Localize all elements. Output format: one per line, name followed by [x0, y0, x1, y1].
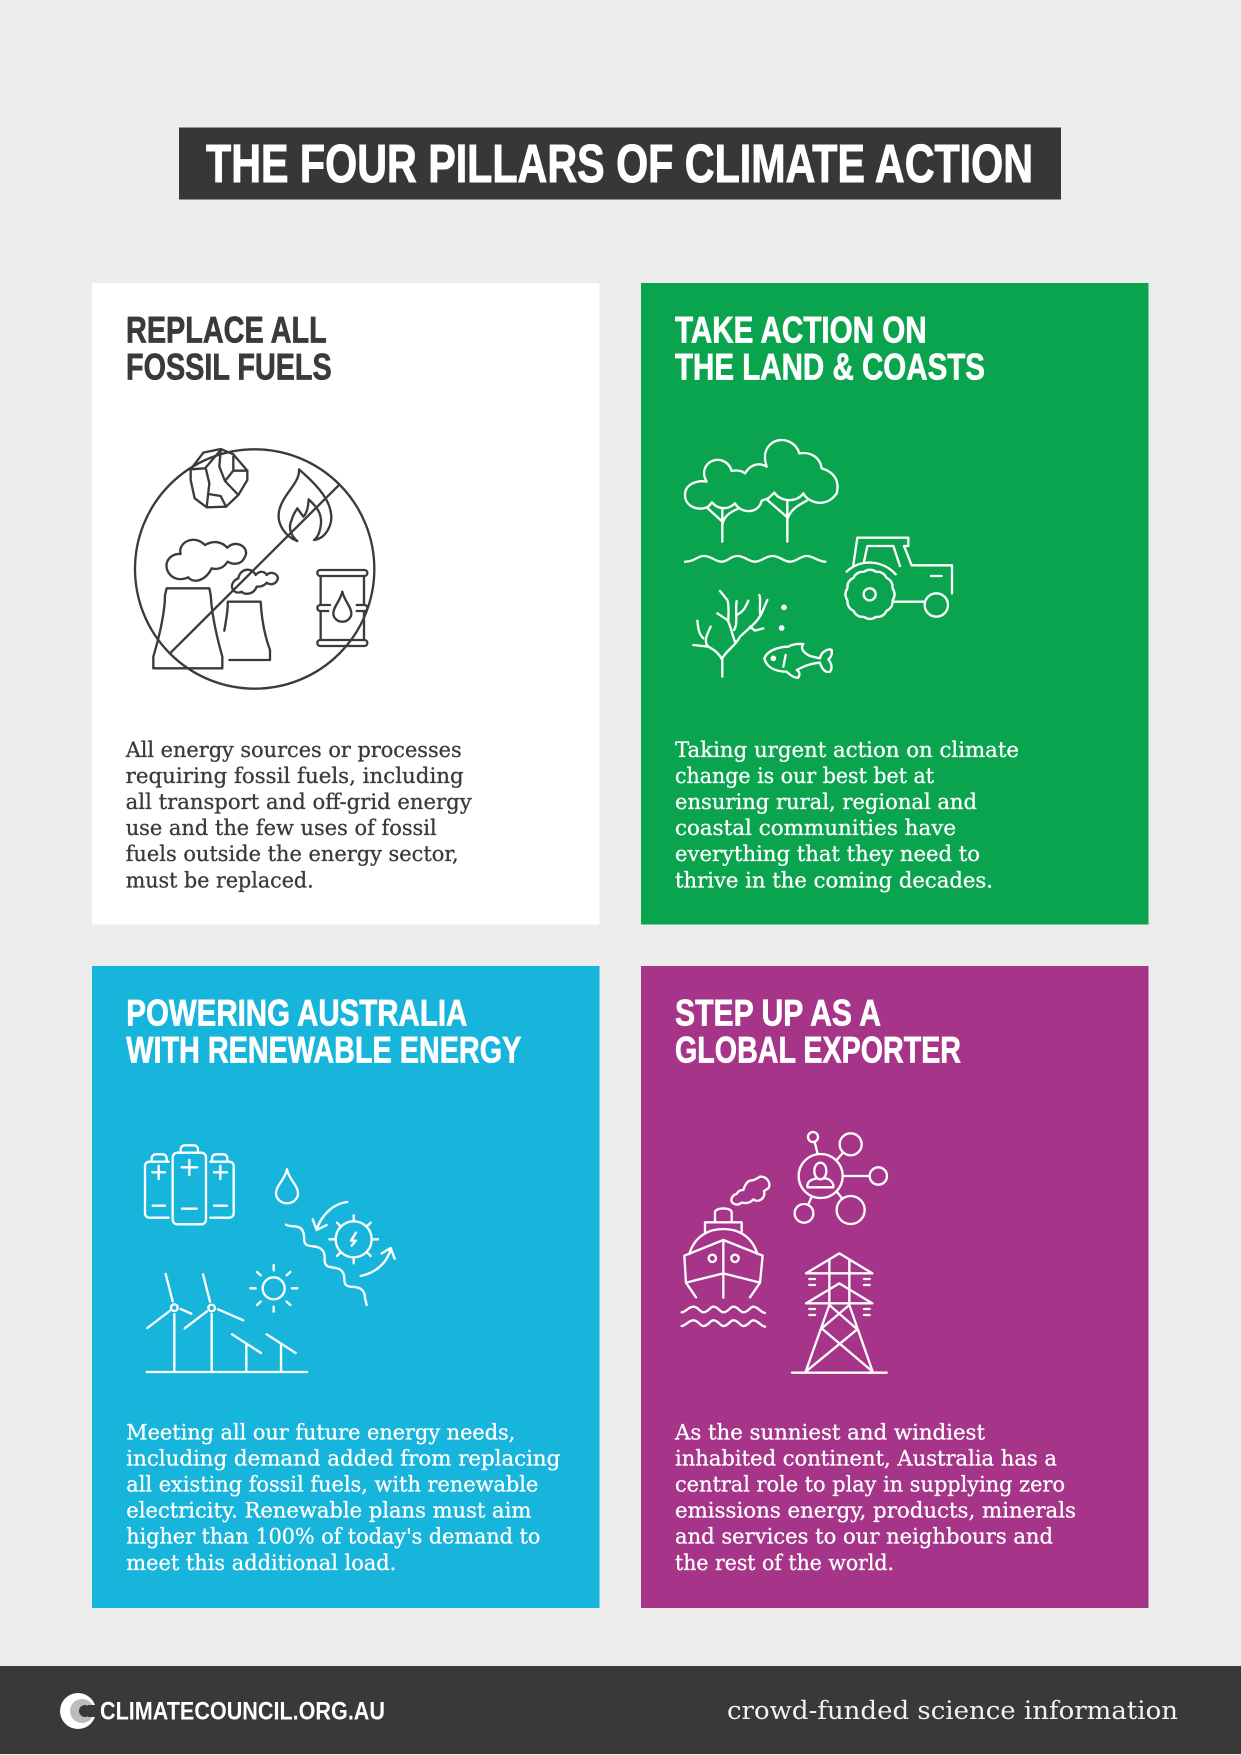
heading: powering australia with renewable energy: POWERING AUSTRALIA: [126, 993, 467, 1034]
body text: step up as a global exporter: [674, 1420, 1076, 1575]
body text: powering australia with renewable energy: Meeting all our future energy needs,: [126, 1420, 515, 1444]
body text: step up as a global exporter: the rest of the world.: [675, 1551, 894, 1575]
body text: take action on the land and coasts: everything that they need to: [675, 842, 980, 866]
heading: powering australia with renewable energy: WITH RENEWABLE ENERGY: [126, 1029, 522, 1070]
heading: replace all fossil fuels: FOSSIL FUELS: [126, 346, 332, 387]
body text: replace all fossil fuels: all transport and off-grid energy: [126, 790, 472, 814]
tagline: crowd-funded science information: [727, 1696, 1178, 1725]
body text: take action on the land and coasts: [675, 738, 1019, 892]
body text: powering australia with renewable energy: higher than 100% of today's demand to: [126, 1525, 540, 1549]
body text: replace all fossil fuels: [125, 738, 472, 892]
body text: replace all fossil fuels: use and the few uses of fossil: [126, 816, 437, 840]
body text: replace all fossil fuels: All energy sources or processes: [125, 738, 462, 762]
body text: powering australia with renewable energy: [126, 1420, 560, 1575]
body text: take action on the land and coasts: ensuring rural, regional and: [675, 790, 977, 814]
body text: powering australia with renewable energy: meet this additional load.: [126, 1551, 396, 1575]
icon: ship, network and transmission tower: [682, 1132, 887, 1373]
icon: batteries, hydro, wind and solar: [145, 1145, 395, 1372]
title banner: [179, 128, 1061, 200]
heading: replace all fossil fuels: [126, 310, 332, 387]
heading: step up as a global exporter: STEP UP AS A: [675, 993, 881, 1034]
heading: take action on the land and coasts: [675, 310, 985, 387]
heading: replace all fossil fuels: REPLACE ALL: [126, 310, 327, 351]
heading: step up as a global exporter: GLOBAL EXPORTER: [675, 1029, 961, 1070]
heading: powering australia with renewable energy: [126, 993, 522, 1070]
icon: trees, tractor, coral and fish: [685, 440, 952, 678]
body text: take action on the land and coasts: thrive in the coming decades.: [675, 868, 993, 892]
body text: step up as a global exporter: emissions energy, products, minerals: [675, 1499, 1076, 1523]
body text: take action on the land and coasts: change is our best bet at: [675, 764, 935, 788]
panel: step up as a global exporter: [641, 966, 1148, 1608]
panel: powering australia with renewable energy: [92, 966, 600, 1608]
panel: take action on the land and coasts: [641, 283, 1148, 924]
body text: replace all fossil fuels: requiring fossil fuels, including: [126, 764, 464, 788]
heading: step up as a global exporter: [675, 993, 961, 1070]
body text: powering australia with renewable energy: including demand added from replacing: [126, 1447, 560, 1471]
footer bar: [0, 1666, 1241, 1754]
body text: step up as a global exporter: and services to our neighbours and: [675, 1525, 1053, 1549]
logo text: CLIMATECOUNCIL.ORG.AU: [100, 1697, 385, 1725]
body text: replace all fossil fuels: must be replaced.: [126, 868, 314, 892]
body text: take action on the land and coasts: coastal communities have: [675, 816, 956, 840]
panel: replace all fossil fuels: [92, 283, 600, 924]
heading: take action on the land and coasts: TAKE ACTION ON: [675, 310, 927, 351]
body text: step up as a global exporter: As the sunniest and windiest: [674, 1420, 986, 1444]
heading: take action on the land and coasts: THE LAND & COASTS: [675, 346, 985, 387]
body text: replace all fossil fuels: fuels outside the energy sector,: [126, 842, 459, 866]
body text: powering australia with renewable energy: electricity. Renewable plans must aim: [126, 1499, 531, 1523]
body text: powering australia with renewable energy: all existing fossil fuels, with renewable: [126, 1473, 538, 1497]
icon: crossed out fossil fuels: [135, 449, 374, 689]
body text: step up as a global exporter: inhabited continent, Australia has a: [675, 1447, 1057, 1471]
body text: take action on the land and coasts: Taking urgent action on climate: [675, 738, 1019, 762]
logo: climate council mark: [60, 1693, 98, 1729]
body text: step up as a global exporter: central role to play in supplying zero: [675, 1473, 1065, 1497]
